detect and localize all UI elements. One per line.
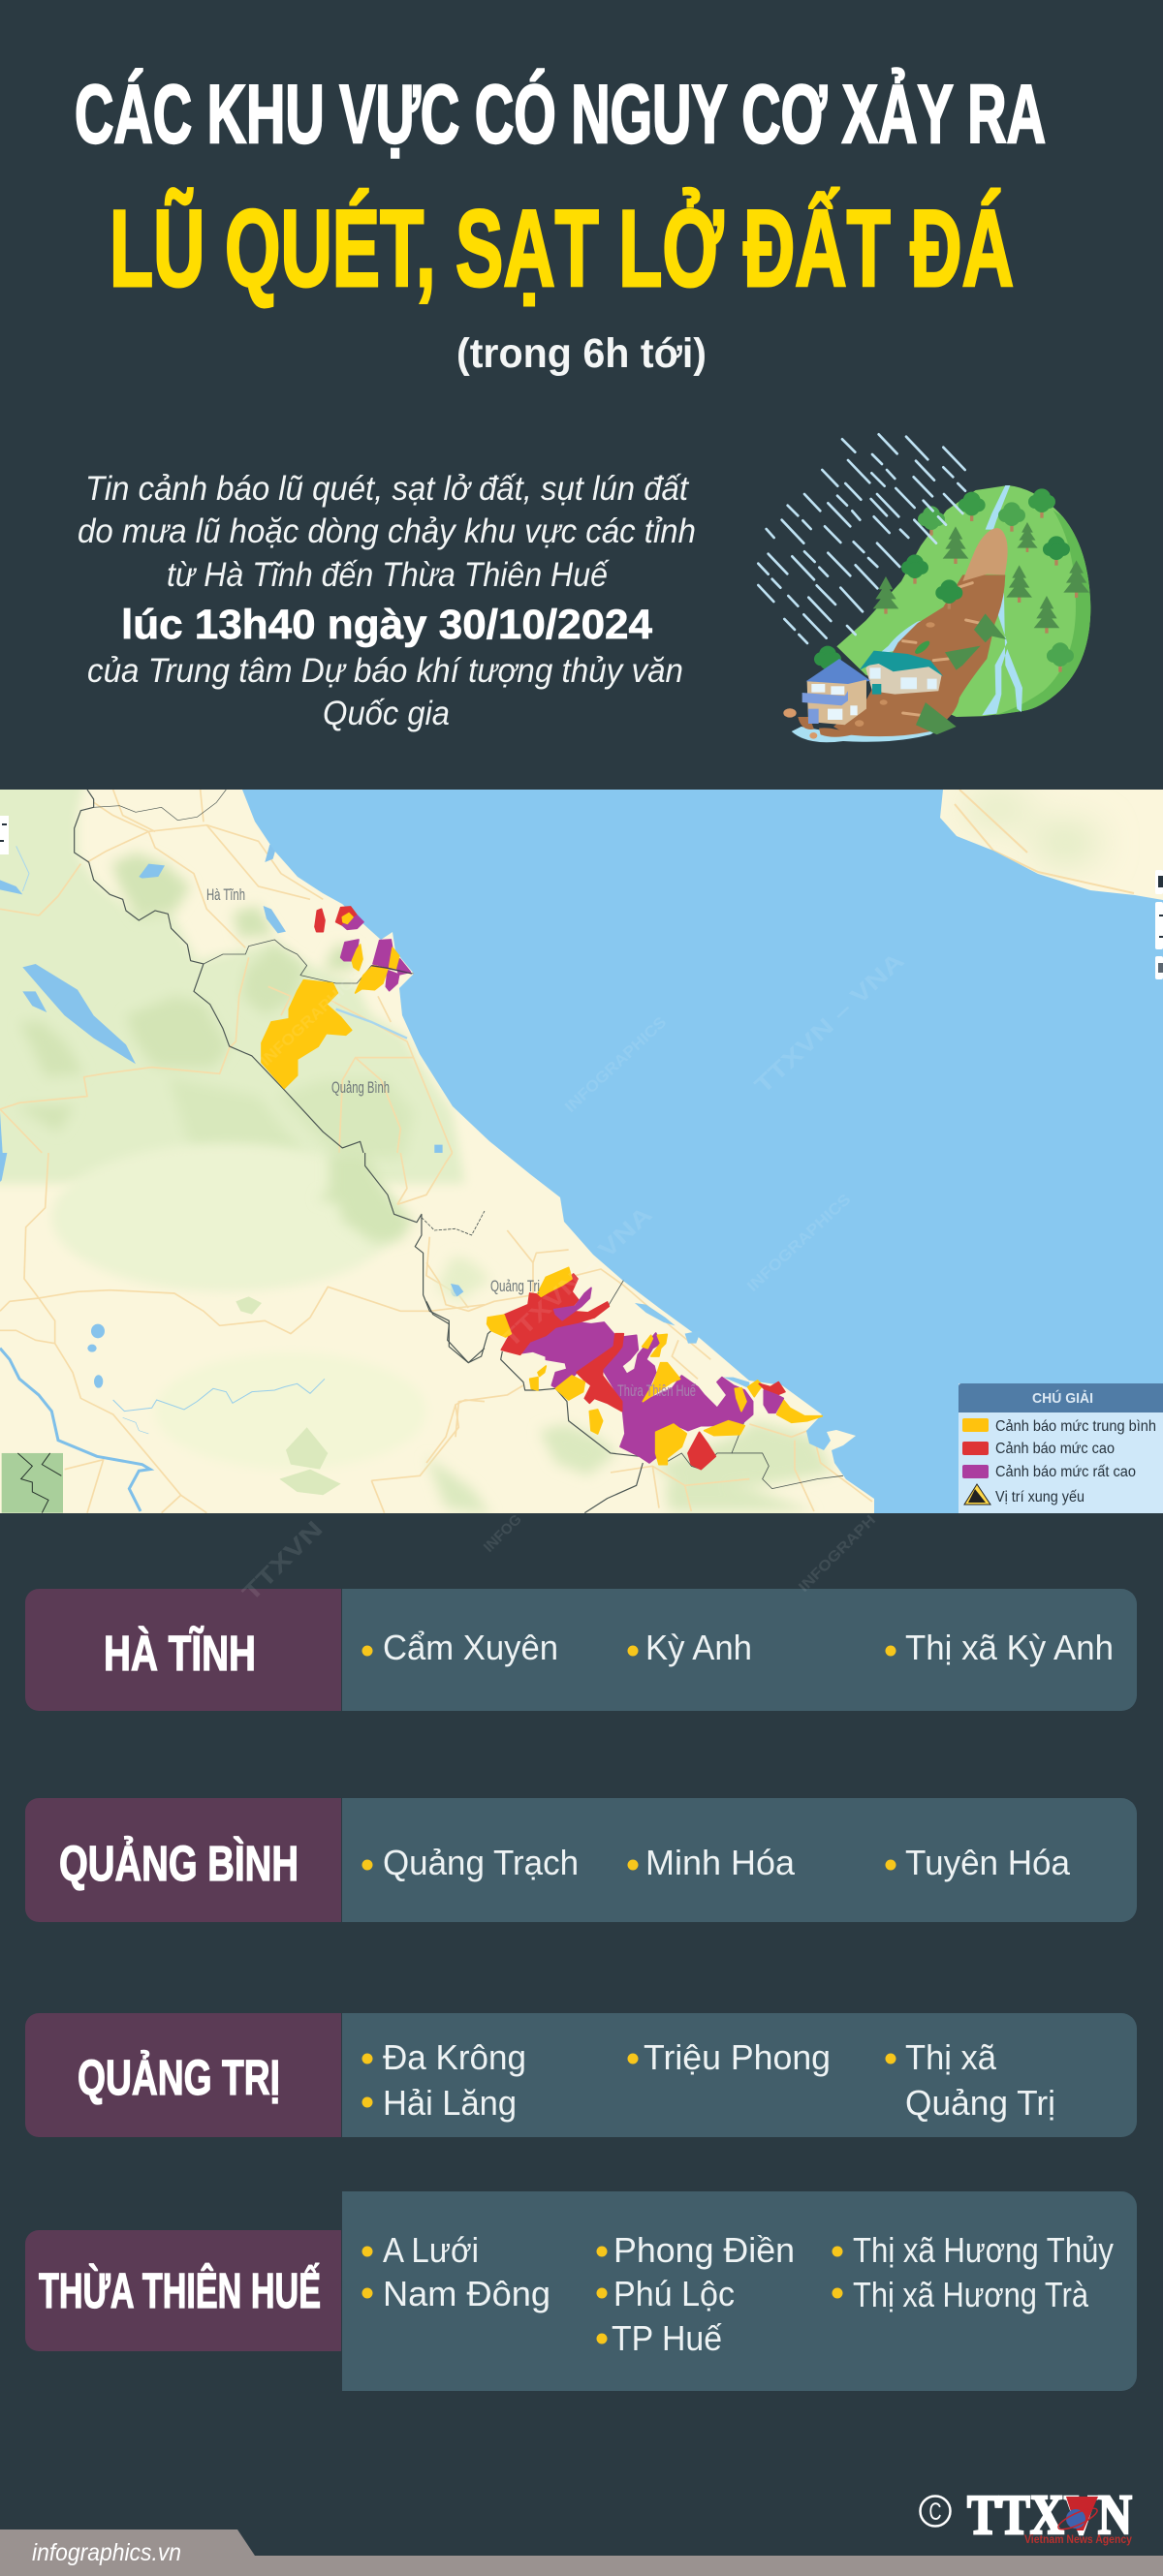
map place names — [206, 885, 696, 1400]
copyright icon: C — [928, 2498, 942, 2526]
upper-right land terrain — [963, 795, 1099, 860]
panel: Quảng Trị — [25, 2013, 1137, 2137]
icon: trees — [814, 488, 1089, 734]
panel: Thừa Thiên Huế — [25, 2191, 1137, 2391]
intro text block: từ Hà Tĩnh đến Thừa Thiên Huế — [167, 556, 610, 594]
hazard zones: Quảng Trị and Thừa Thiên Huế — [487, 1267, 822, 1470]
districts: Thị xã Kỳ Anh — [905, 1628, 1114, 1667]
districts: Thị xã — [905, 2037, 997, 2077]
legend: medium: Cảnh báo mức trung bình — [995, 1418, 1156, 1435]
tagline: Vietnam News Agency — [1024, 2532, 1132, 2546]
wordmark: TTXVN — [967, 2483, 1132, 2546]
province borders — [75, 790, 843, 1513]
intro text block: lúc 13h40 ngày 30/10/2024 — [121, 602, 652, 648]
districts — [362, 2230, 1114, 2358]
districts: Tuyên Hóa — [905, 1843, 1071, 1882]
districts: Quảng Trị — [905, 2083, 1055, 2123]
subtitle: (trong 6h tới) — [456, 330, 707, 377]
watermarks: INFOGRAPH — [796, 1512, 879, 1596]
roads south — [0, 1153, 485, 1513]
map place names: Quảng Trị — [490, 1277, 540, 1295]
districts: Thị xã Hương Thủy — [853, 2230, 1114, 2270]
heading: QUẢNG TRỊ — [78, 2049, 280, 2105]
terrain north-west — [0, 763, 465, 1184]
districts: TP Huế — [612, 2318, 722, 2358]
districts: Cẩm Xuyên — [383, 1628, 558, 1667]
watermarks: INFOG — [481, 1511, 525, 1556]
copyright icon — [921, 2496, 950, 2527]
icon: rain — [758, 434, 965, 643]
districts — [362, 1843, 1071, 1882]
legend title: CHÚ GIẢI — [1032, 1389, 1093, 1407]
hazard zones: Hà Tĩnh and Quảng Bình — [262, 907, 412, 1088]
heading: THỪA THIÊN HUẾ — [39, 2262, 321, 2318]
intro text block — [78, 470, 696, 732]
districts: Đa Krông — [383, 2037, 526, 2077]
rivers south — [0, 1153, 460, 1511]
panel: Hà Tĩnh — [25, 1589, 1137, 1711]
terrain south-east — [426, 1230, 872, 1514]
icon: landslide illustration — [758, 434, 1090, 742]
legend: very high — [962, 1465, 1136, 1478]
title — [75, 68, 1046, 377]
map place names: Thừa Thiên Huế — [617, 1381, 696, 1400]
sea — [242, 790, 1163, 1514]
legend: vulnerable spot: Vị trí xung yếu — [995, 1489, 1084, 1505]
terrain south-west — [0, 1143, 485, 1513]
legend: very high: Cảnh báo mức rất cao — [995, 1464, 1136, 1480]
intro text block: Tin cảnh báo lũ quét, sạt lở đất, sụt lún đất — [85, 470, 689, 508]
districts: Nam Đông — [383, 2274, 550, 2313]
icon: mud slide — [783, 528, 1008, 742]
watermarks: INFOGRAPHICS — [258, 967, 365, 1070]
footer band — [0, 2529, 1163, 2576]
districts — [362, 2037, 1055, 2123]
legend: high: Cảnh báo mức cao — [995, 1441, 1115, 1457]
districts — [362, 1628, 1114, 1667]
lakes north — [0, 845, 443, 1153]
watermarks: INFOGRAPHICS — [562, 1013, 670, 1116]
roads north — [0, 790, 453, 1153]
districts: Hải Lăng — [383, 2083, 517, 2123]
districts: Quảng Trạch — [383, 1843, 579, 1882]
watermarks: TTXVN — [237, 1516, 328, 1606]
districts: Triệu Phong — [644, 2037, 831, 2077]
intro text block: Quốc gia — [323, 695, 450, 732]
districts: Minh Hóa — [645, 1843, 796, 1882]
map — [0, 763, 1163, 1514]
legend: high — [962, 1442, 1115, 1455]
heading: QUẢNG BÌNH — [59, 1835, 299, 1891]
watermarks: INFOGRAPHICS — [744, 1191, 855, 1295]
map place names: Quảng Bình — [331, 1078, 390, 1097]
icon: houses — [802, 651, 943, 725]
watermarks: TTXVN – VNA — [498, 1201, 657, 1352]
watermarks: TTXVN – VNA — [750, 947, 909, 1099]
lagoons — [635, 1303, 749, 1388]
watermarks — [237, 947, 909, 1606]
legend: vulnerable spot — [964, 1484, 1084, 1505]
website label: infographics.vn — [32, 2539, 181, 2566]
inset locator map — [2, 1453, 63, 1513]
panel: Quảng Bình — [25, 1798, 1137, 1922]
red V and globe — [1056, 2497, 1099, 2533]
map legend — [959, 1383, 1163, 1514]
districts: Phong Điền — [613, 2230, 795, 2270]
icon: hillside — [836, 485, 1090, 717]
map side controls — [0, 816, 1163, 979]
map place names: Hà Tĩnh — [206, 885, 245, 904]
heading: HÀ TĨNH — [104, 1625, 256, 1681]
logo: TTXVN — [921, 2483, 1132, 2546]
intro text block: của Trung tâm Dự báo khí tượng thủy văn — [87, 652, 683, 690]
intro text block: do mưa lũ hoặc dòng chảy khu vực các tỉnh — [78, 512, 696, 550]
districts: Thị xã Hương Trà — [853, 2275, 1089, 2314]
districts: Kỳ Anh — [645, 1628, 752, 1667]
districts: Phú Lộc — [613, 2274, 735, 2313]
districts: A Lưới — [383, 2230, 479, 2270]
